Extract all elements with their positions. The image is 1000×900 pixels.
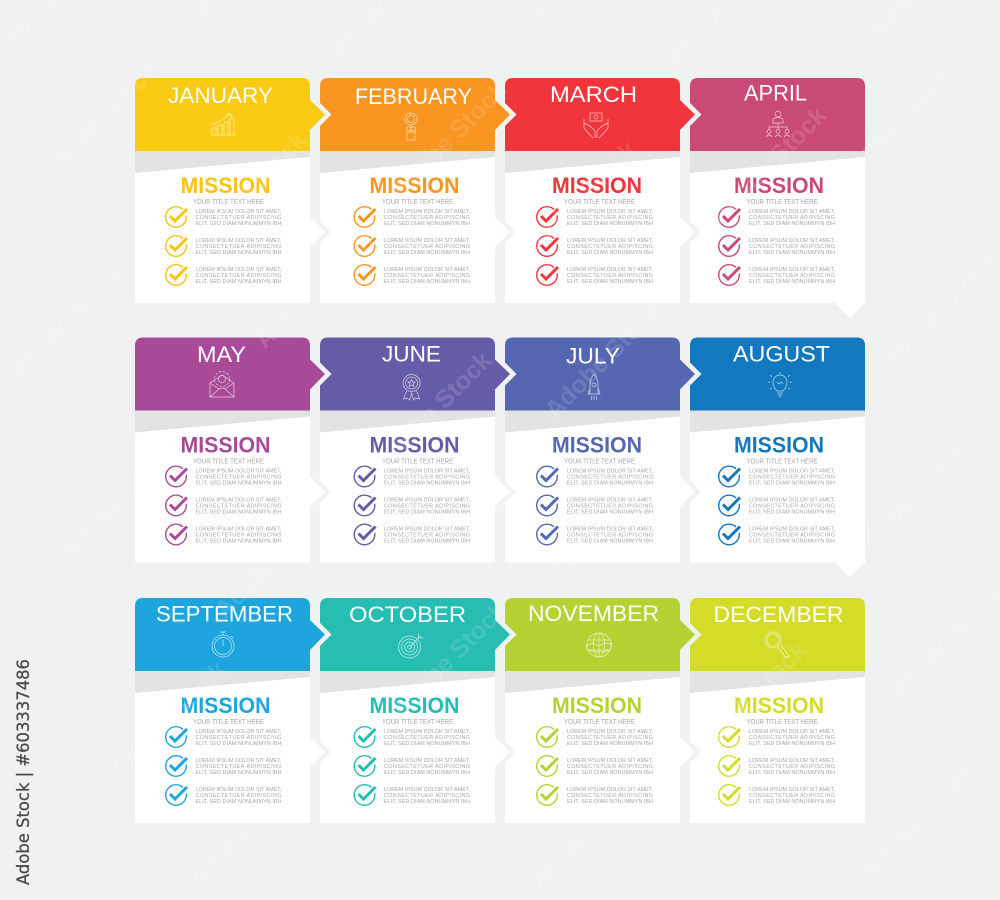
card: November: LOREM IPSUM DOLOR SIT AMET,	[567, 758, 654, 764]
card: September: LOREM IPSUM DOLOR SIT AMET,	[196, 758, 282, 764]
watermark pattern: Adobe Stock	[54, 436, 182, 564]
card: November: ELIT, SED DIAM NONUMMYN IBH	[567, 741, 653, 747]
card: October	[320, 598, 516, 823]
card: October: LOREM IPSUM DOLOR SIT AMET,	[384, 758, 470, 764]
watermark pattern: Adobe Stock	[104, 656, 232, 784]
card: January: YOUR TITLE TEXT HERE	[193, 197, 264, 206]
watermark pattern: Adobe Stock	[184, 126, 312, 254]
card: September	[135, 598, 332, 823]
card: August: LOREM IPSUM DOLOR SIT AMET,	[749, 526, 836, 532]
card: June: ELIT, SED DIAM NONUMMYN IBH	[384, 538, 470, 544]
card: March: LOREM IPSUM DOLOR SIT AMET,	[567, 209, 654, 215]
card: July: ELIT, SED DIAM NONUMMYN IBH	[567, 538, 653, 544]
card: May: YOUR TITLE TEXT HERE	[193, 456, 264, 466]
card: November: YOUR TITLE TEXT HERE	[564, 717, 635, 726]
card: July: YOUR TITLE TEXT HERE	[564, 456, 635, 466]
card: July: LOREM IPSUM DOLOR SIT AMET,	[567, 468, 654, 474]
card: January: JANUARY	[168, 83, 273, 108]
card: December	[690, 598, 865, 823]
card: June: JUNE	[382, 342, 441, 366]
card: January: LOREM IPSUM DOLOR SIT AMET,	[196, 267, 282, 273]
card: September: YOUR TITLE TEXT HERE	[193, 717, 264, 726]
card: January: LOREM IPSUM DOLOR SIT AMET,	[196, 209, 282, 215]
card: October: CONSECTETUER ADIPISCING	[384, 764, 470, 770]
card: January: MISSION	[180, 173, 270, 198]
card: April: ELIT, SED DIAM NONUMMYN IBH	[749, 250, 835, 256]
card: February: LOREM IPSUM DOLOR SIT AMET,	[384, 238, 470, 244]
card: December: CONSECTETUER ADIPISCING	[749, 793, 835, 799]
card: November: LOREM IPSUM DOLOR SIT AMET,	[567, 729, 654, 735]
icon: hands with banknote	[584, 113, 608, 138]
card: July: CONSECTETUER ADIPISCING	[567, 474, 653, 480]
card: May: MISSION	[180, 432, 270, 458]
card: December: LOREM IPSUM DOLOR SIT AMET,	[749, 758, 836, 764]
card: May: LOREM IPSUM DOLOR SIT AMET,	[196, 498, 282, 504]
icon: globe with handshake	[586, 633, 612, 657]
card: May: LOREM IPSUM DOLOR SIT AMET,	[196, 468, 282, 474]
icon: award badge	[403, 374, 420, 400]
card: August: YOUR TITLE TEXT HERE	[746, 456, 818, 466]
card: September: LOREM IPSUM DOLOR SIT AMET,	[196, 787, 282, 793]
watermark pattern: Adobe Stock	[524, 766, 652, 894]
watermark pattern: Adobe Stock	[684, 636, 812, 764]
card: January: CONSECTETUER ADIPISCING	[196, 273, 282, 279]
card: April: LOREM IPSUM DOLOR SIT AMET,	[749, 209, 836, 215]
card: January: ELIT, SED DIAM NONUMMYN IBH	[196, 279, 282, 285]
watermark pattern: Adobe Stock	[384, 76, 512, 204]
card: January: CONSECTETUER ADIPISCING	[196, 215, 282, 221]
card: August: ELIT, SED DIAM NONUMMYN IBH	[749, 510, 835, 516]
card: August: ELIT, SED DIAM NONUMMYN IBH	[749, 480, 835, 486]
card: December: ELIT, SED DIAM NONUMMYN IBH	[749, 770, 835, 776]
card: February: LOREM IPSUM DOLOR SIT AMET,	[384, 209, 470, 215]
card: May: LOREM IPSUM DOLOR SIT AMET,	[196, 526, 282, 532]
card: July: CONSECTETUER ADIPISCING	[567, 504, 653, 510]
icon: target with arrow	[399, 633, 424, 658]
card: March: YOUR TITLE TEXT HERE	[564, 197, 635, 206]
card: April: LOREM IPSUM DOLOR SIT AMET,	[749, 238, 836, 244]
card: March: CONSECTETUER ADIPISCING	[567, 215, 653, 221]
card: February: YOUR TITLE TEXT HERE	[382, 197, 453, 206]
card: August: AUGUST	[733, 342, 830, 366]
watermark pattern: Adobe Stock	[844, 436, 972, 564]
card: September: CONSECTETUER ADIPISCING	[196, 764, 282, 770]
card: April: CONSECTETUER ADIPISCING	[749, 273, 835, 279]
card: February: ELIT, SED DIAM NONUMMYN IBH	[384, 250, 470, 256]
card: November: ELIT, SED DIAM NONUMMYN IBH	[567, 770, 653, 776]
card: April: YOUR TITLE TEXT HERE	[746, 197, 818, 206]
watermark pattern: Adobe Stock	[854, 756, 982, 884]
card: July: JULY	[566, 344, 620, 368]
card: February: ELIT, SED DIAM NONUMMYN IBH	[384, 221, 470, 227]
card: November: MISSION	[552, 693, 642, 718]
card: September: ELIT, SED DIAM NONUMMYN IBH	[196, 770, 282, 776]
card: November: ELIT, SED DIAM NONUMMYN IBH	[567, 799, 653, 805]
card: February	[320, 78, 516, 303]
watermark pattern: Adobe Stock	[539, 296, 667, 424]
card: December: ELIT, SED DIAM NONUMMYN IBH	[749, 741, 835, 747]
card: February: ELIT, SED DIAM NONUMMYN IBH	[384, 279, 470, 285]
card: July: CONSECTETUER ADIPISCING	[567, 532, 653, 538]
card: July: ELIT, SED DIAM NONUMMYN IBH	[567, 510, 653, 516]
card: November: CONSECTETUER ADIPISCING	[567, 793, 653, 799]
watermark pattern: Adobe Stock	[544, 456, 672, 584]
icon: light bulb	[768, 372, 792, 397]
card: January: CONSECTETUER ADIPISCING	[196, 244, 282, 250]
icon: org chart	[766, 111, 790, 137]
card: January: LOREM IPSUM DOLOR SIT AMET,	[196, 238, 282, 244]
card: July	[505, 338, 702, 562]
icon: rocket	[588, 374, 600, 400]
card: June: ELIT, SED DIAM NONUMMYN IBH	[384, 480, 470, 486]
card: December: DECEMBER	[714, 602, 844, 627]
card: June: LOREM IPSUM DOLOR SIT AMET,	[384, 498, 470, 504]
card: May: ELIT, SED DIAM NONUMMYN IBH	[196, 538, 282, 544]
card: December: CONSECTETUER ADIPISCING	[749, 764, 835, 770]
card: June: ELIT, SED DIAM NONUMMYN IBH	[384, 510, 470, 516]
card: September: SEPTEMBER	[156, 602, 293, 627]
card: October: LOREM IPSUM DOLOR SIT AMET,	[384, 787, 470, 793]
card: March: ELIT, SED DIAM NONUMMYN IBH	[567, 221, 653, 227]
card: February: MISSION	[370, 173, 460, 198]
watermark pattern: Adobe Stock	[704, 101, 832, 229]
card: June: LOREM IPSUM DOLOR SIT AMET,	[384, 526, 470, 532]
stock id label: Adobe Stock | #603337486	[14, 659, 34, 885]
card: August: CONSECTETUER ADIPISCING	[749, 504, 835, 510]
card: October: ELIT, SED DIAM NONUMMYN IBH	[384, 770, 470, 776]
card: May: MAY	[197, 342, 246, 367]
card: May: CONSECTETUER ADIPISCING	[196, 504, 282, 510]
card: April: CONSECTETUER ADIPISCING	[749, 215, 835, 221]
card: October: OCTOBER	[349, 602, 466, 627]
card: November: NOVEMBER	[528, 601, 659, 626]
card: September: CONSECTETUER ADIPISCING	[196, 793, 282, 799]
card: May	[135, 338, 332, 562]
card: December: CONSECTETUER ADIPISCING	[749, 735, 835, 741]
watermark pattern: Adobe Stock	[184, 766, 312, 894]
card: April: CONSECTETUER ADIPISCING	[749, 244, 835, 250]
card: April	[690, 78, 865, 318]
card: March: LOREM IPSUM DOLOR SIT AMET,	[567, 238, 654, 244]
watermark pattern: Adobe Stock	[369, 346, 497, 474]
card: November: CONSECTETUER ADIPISCING	[567, 764, 653, 770]
card: March	[505, 78, 702, 303]
card: June: CONSECTETUER ADIPISCING	[384, 504, 470, 510]
card: May: ELIT, SED DIAM NONUMMYN IBH	[196, 480, 282, 486]
card: May: CONSECTETUER ADIPISCING	[196, 474, 282, 480]
card: March: ELIT, SED DIAM NONUMMYN IBH	[567, 250, 653, 256]
card: November: CONSECTETUER ADIPISCING	[567, 735, 653, 741]
card: August: ELIT, SED DIAM NONUMMYN IBH	[749, 538, 835, 544]
watermark pattern: Adobe Stock	[514, 136, 642, 264]
card: November	[505, 598, 702, 823]
card: September: ELIT, SED DIAM NONUMMYN IBH	[196, 799, 282, 805]
card: May: CONSECTETUER ADIPISCING	[196, 532, 282, 538]
card: January	[135, 78, 332, 303]
card: April: LOREM IPSUM DOLOR SIT AMET,	[749, 267, 836, 273]
card: September: MISSION	[180, 693, 270, 718]
card: October: CONSECTETUER ADIPISCING	[384, 735, 470, 741]
watermark pattern: Adobe Stock	[384, 596, 512, 724]
card: October: MISSION	[370, 693, 460, 718]
card: December: YOUR TITLE TEXT HERE	[746, 717, 818, 726]
card: February: CONSECTETUER ADIPISCING	[384, 215, 470, 221]
watermark pattern: Adobe Stock	[249, 226, 377, 354]
card: March: MARCH	[550, 82, 637, 107]
card: March: LOREM IPSUM DOLOR SIT AMET,	[567, 267, 654, 273]
card: May: ELIT, SED DIAM NONUMMYN IBH	[196, 510, 282, 516]
card: June: CONSECTETUER ADIPISCING	[384, 474, 470, 480]
card: July: MISSION	[552, 432, 642, 458]
card: April: MISSION	[734, 173, 824, 198]
card: July: LOREM IPSUM DOLOR SIT AMET,	[567, 498, 654, 504]
card: March: ELIT, SED DIAM NONUMMYN IBH	[567, 279, 653, 285]
card: April: APRIL	[744, 81, 807, 106]
icon: envelope with gear	[210, 372, 234, 397]
card: October: LOREM IPSUM DOLOR SIT AMET,	[384, 729, 470, 735]
card: August: CONSECTETUER ADIPISCING	[749, 532, 835, 538]
card: June	[320, 338, 516, 562]
icon: money plant	[405, 113, 417, 140]
watermark pattern: Adobe Stock	[4, 256, 132, 384]
card: March: CONSECTETUER ADIPISCING	[567, 244, 653, 250]
card: June: MISSION	[370, 432, 460, 458]
icon: magnifier	[765, 632, 789, 658]
card: December: LOREM IPSUM DOLOR SIT AMET,	[749, 787, 836, 793]
watermark pattern: Adobe Stock	[829, 61, 957, 189]
icon: growth chart	[211, 114, 235, 135]
card: July: ELIT, SED DIAM NONUMMYN IBH	[567, 480, 653, 486]
watermark pattern: Adobe Stock	[34, 56, 162, 184]
card: December: ELIT, SED DIAM NONUMMYN IBH	[749, 799, 835, 805]
card: February: CONSECTETUER ADIPISCING	[384, 273, 470, 279]
card: January: ELIT, SED DIAM NONUMMYN IBH	[196, 221, 282, 227]
card: August: CONSECTETUER ADIPISCING	[749, 474, 835, 480]
card: August	[690, 338, 865, 578]
card: February: FEBRUARY	[355, 84, 472, 109]
card: March: MISSION	[552, 173, 642, 198]
card: February: CONSECTETUER ADIPISCING	[384, 244, 470, 250]
card: September: CONSECTETUER ADIPISCING	[196, 735, 282, 741]
card: April: ELIT, SED DIAM NONUMMYN IBH	[749, 279, 835, 285]
card: August: LOREM IPSUM DOLOR SIT AMET,	[749, 498, 836, 504]
card: January: ELIT, SED DIAM NONUMMYN IBH	[196, 250, 282, 256]
card: June: LOREM IPSUM DOLOR SIT AMET,	[384, 468, 470, 474]
card: December: MISSION	[734, 693, 824, 718]
card: October: YOUR TITLE TEXT HERE	[382, 717, 453, 726]
card: June: CONSECTETUER ADIPISCING	[384, 532, 470, 538]
card: August: MISSION	[734, 432, 824, 458]
card: September: ELIT, SED DIAM NONUMMYN IBH	[196, 741, 282, 747]
card: April: ELIT, SED DIAM NONUMMYN IBH	[749, 221, 835, 227]
card: December: LOREM IPSUM DOLOR SIT AMET,	[749, 729, 836, 735]
card: February: LOREM IPSUM DOLOR SIT AMET,	[384, 267, 470, 273]
watermark pattern: Adobe Stock	[209, 496, 337, 624]
card: September: LOREM IPSUM DOLOR SIT AMET,	[196, 729, 282, 735]
card: August: LOREM IPSUM DOLOR SIT AMET,	[749, 468, 836, 474]
card: October: ELIT, SED DIAM NONUMMYN IBH	[384, 799, 470, 805]
card: November: LOREM IPSUM DOLOR SIT AMET,	[567, 787, 654, 793]
watermark pattern: Adobe Stock	[874, 246, 1000, 374]
icon: stopwatch	[212, 632, 234, 657]
card: October: CONSECTETUER ADIPISCING	[384, 793, 470, 799]
card: October: ELIT, SED DIAM NONUMMYN IBH	[384, 741, 470, 747]
card: June: YOUR TITLE TEXT HERE	[382, 456, 453, 466]
card: July: LOREM IPSUM DOLOR SIT AMET,	[567, 526, 654, 532]
card: March: CONSECTETUER ADIPISCING	[567, 273, 653, 279]
